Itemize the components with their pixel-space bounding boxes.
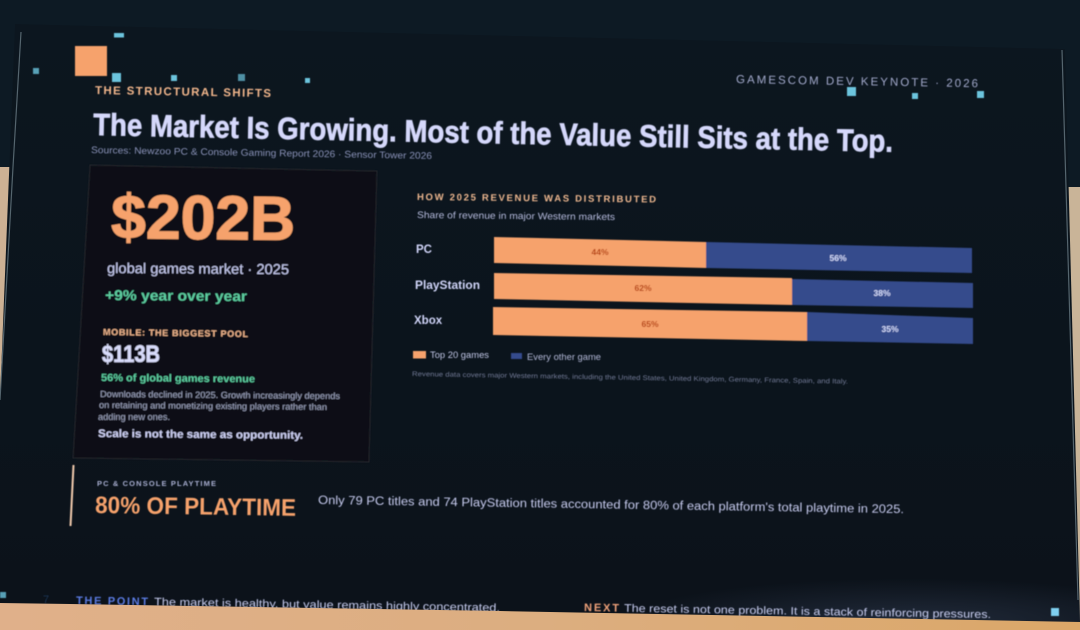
stacked bar chart	[414, 237, 973, 344]
footer: the point: The market is healthy, but value remains highly concentrated.	[154, 596, 500, 614]
callout label: PC & CONSOLE PLAYTIME	[97, 479, 216, 488]
bar: PC: PC	[416, 244, 432, 256]
right wall	[1066, 187, 1080, 630]
floor below the screen	[0, 603, 1080, 630]
icon: orange brand square	[75, 46, 107, 76]
chart legend	[413, 350, 601, 362]
mobile value: $113B	[102, 341, 160, 368]
mobile share: 56% of global games revenue	[101, 372, 255, 385]
mobile body text: on retaining and monetizing existing players rather than	[99, 400, 327, 412]
bar: PlayStation: 62%	[634, 283, 652, 293]
mobile body text	[98, 389, 341, 422]
callout: playtime	[70, 465, 904, 526]
bar: Xbox: 35%	[881, 324, 899, 334]
market caption: global games market · 2025	[107, 261, 289, 278]
mobile takeaway: Scale is not the same as opportunity.	[98, 428, 303, 442]
footer: next: The reset is not one problem. It is a stack of reinforcing pressures.	[624, 603, 991, 621]
footer: the point	[76, 595, 500, 614]
mobile body text: Downloads declined in 2025. Growth increasingly depends	[100, 389, 341, 401]
bar: PlayStation	[415, 273, 973, 308]
mobile heading: MOBILE: THE BIGGEST POOL	[103, 327, 249, 339]
header label: gamescom dev keynote: GAMESCOM DEV KEYNOTE · 2026	[736, 74, 978, 90]
bar: PlayStation: 38%	[873, 288, 891, 298]
bar: PC: 56%	[829, 253, 847, 263]
chart subtitle: Share of revenue in major Western markets	[417, 210, 615, 223]
callout body: Only 79 PC titles and 74 PlayStation titles accounted for 80% of each platform's total playtime in 2025.	[318, 495, 904, 516]
bar: Xbox	[414, 307, 973, 344]
chart legend: Every other game	[527, 352, 601, 362]
bar: PC: 44%	[591, 247, 609, 257]
chart heading: HOW 2025 REVENUE WAS DISTRIBUTED	[417, 192, 656, 206]
footer: next: NEXT	[584, 602, 619, 615]
sources line: Sources: Newzoo PC & Console Gaming Report 2026 · Sensor Tower 2026	[91, 145, 432, 162]
chart legend: Top 20 games	[430, 350, 490, 360]
bar: PC	[416, 237, 972, 273]
title: The Market Is Growing. Most of the Value Still Sits at the Top.	[93, 107, 893, 159]
page number: 7	[43, 594, 49, 606]
accent bar	[70, 465, 74, 526]
bar: PlayStation: PlayStation	[415, 280, 480, 292]
growth figure: +9% year over year	[105, 288, 247, 305]
footer: the point: THE POINT	[76, 595, 148, 608]
big number: $202B: $202B	[111, 183, 296, 254]
bar: Xbox: 65%	[641, 319, 659, 329]
bar: Xbox: Xbox	[414, 315, 443, 327]
left wall	[0, 167, 14, 400]
eyebrow: the structural shifts: THE STRUCTURAL SHIFTS	[95, 85, 271, 100]
mobile body text: adding new ones.	[98, 412, 170, 422]
callout headline: 80% OF PLAYTIME	[95, 492, 296, 522]
screen glow lower right	[600, 550, 1080, 622]
chart footnote: Revenue data covers major Western markets, including the United States, United Kingdom, Germany, France, Spain, and Italy.	[412, 371, 848, 386]
panel: global market	[73, 165, 377, 462]
